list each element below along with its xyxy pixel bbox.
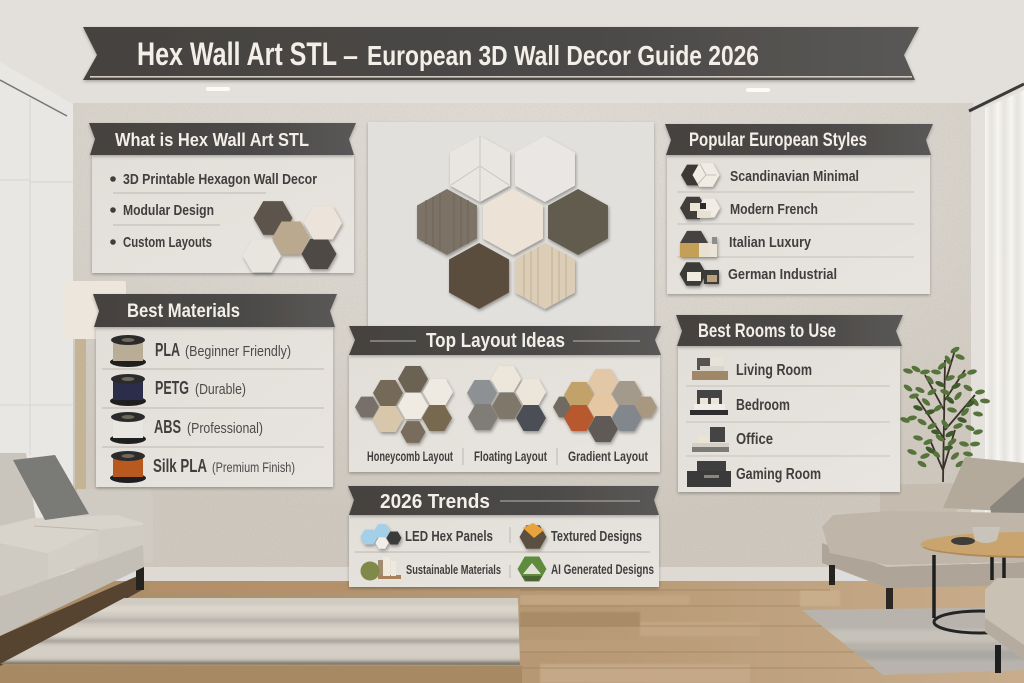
title banner: Hex Wall Art STL xyxy=(137,36,337,72)
bullet list xyxy=(110,171,317,251)
title banner xyxy=(83,27,919,80)
trend: LED hex panels xyxy=(360,524,493,549)
right sofa and coffee table xyxy=(822,457,1024,673)
layout: honeycomb xyxy=(355,366,453,464)
hexagon arrangement xyxy=(417,136,608,309)
layout: gradient xyxy=(553,369,657,464)
row: PETG: (Durable) xyxy=(195,382,246,398)
trend: sustainable materials xyxy=(360,557,501,580)
row: Silk PLA: Silk PLA xyxy=(153,456,207,476)
trend: AI generated designs: AI Generated Designs xyxy=(551,561,654,577)
style: italian luxury: Italian Luxury xyxy=(729,234,812,251)
panel: 2026 trends xyxy=(348,486,659,587)
room: gaming room: Gaming Room xyxy=(736,466,821,483)
heading ribbon xyxy=(93,294,337,327)
row: Silk PLA: (Premium Finish) xyxy=(212,459,295,475)
style: scandinavian minimal xyxy=(681,163,859,187)
heading ribbon: Top Layout Ideas xyxy=(426,330,565,352)
plant xyxy=(899,345,990,482)
layout: floating: Floating Layout xyxy=(474,448,547,464)
room: office xyxy=(692,427,773,452)
row: ABS xyxy=(110,412,263,444)
style: italian luxury xyxy=(680,231,812,257)
style: scandinavian minimal: Scandinavian Minimal xyxy=(730,168,859,185)
trend: LED hex panels: LED Hex Panels xyxy=(405,529,493,545)
layout: gradient: Gradient Layout xyxy=(568,448,648,464)
floor lamp xyxy=(64,281,126,490)
row: PLA: (Beginner Friendly) xyxy=(185,344,291,360)
title banner: European 3D Wall Decor Guide 2026 xyxy=(367,40,759,71)
trend: AI generated designs xyxy=(518,556,654,582)
row: Silk PLA xyxy=(110,451,295,483)
room: living room xyxy=(692,358,812,380)
title banner: – xyxy=(343,40,358,71)
heading ribbon xyxy=(676,315,903,346)
trend: sustainable materials: Sustainable Materials xyxy=(406,562,501,577)
bullet list: Modular Design xyxy=(123,202,214,219)
panel: what is hex wall art stl xyxy=(89,123,356,273)
heading ribbon: What is Hex Wall Art STL xyxy=(115,129,309,150)
bullet list: 3D Printable Hexagon Wall Decor xyxy=(123,171,317,188)
left rug xyxy=(0,598,520,665)
room: living room: Living Room xyxy=(736,362,812,379)
right rug xyxy=(802,608,1024,675)
room: bedroom: Bedroom xyxy=(736,397,790,414)
panel: top layout ideas xyxy=(349,326,661,472)
row: PLA xyxy=(110,335,291,367)
bullet list: Custom Layouts xyxy=(123,234,212,251)
panel: center hexagon wall art xyxy=(368,122,654,328)
heading ribbon xyxy=(349,326,661,355)
row: PETG xyxy=(110,374,246,406)
panel: popular european styles xyxy=(665,124,933,294)
style: modern french: Modern French xyxy=(730,201,818,218)
room: bedroom xyxy=(690,390,790,415)
trend: textured designs xyxy=(520,523,642,549)
heading ribbon xyxy=(89,123,356,155)
layout: honeycomb: Honeycomb Layout xyxy=(367,448,453,464)
trend: textured designs: Textured Designs xyxy=(551,529,642,545)
heading ribbon xyxy=(665,124,933,155)
row: ABS: (Professional) xyxy=(187,421,263,437)
floor shadow under left sofa xyxy=(0,575,142,666)
heading ribbon: Popular European Styles xyxy=(689,130,867,151)
icon: hexagon cluster xyxy=(243,201,342,272)
layout: floating xyxy=(467,366,547,464)
left sofa xyxy=(0,453,153,636)
hexagon surface details xyxy=(426,136,566,305)
heading ribbon: 2026 Trends xyxy=(380,491,490,513)
heading ribbon xyxy=(348,486,659,515)
room: office: Office xyxy=(736,431,773,448)
heading ribbon: Best Materials xyxy=(127,301,240,322)
room: gaming room xyxy=(687,461,821,487)
row: PLA: PLA xyxy=(155,340,180,360)
style: german industrial: German Industrial xyxy=(728,266,837,283)
heading ribbon: Best Rooms to Use xyxy=(698,321,836,342)
style: german industrial xyxy=(680,262,837,286)
row: ABS: ABS xyxy=(154,417,181,437)
panel: best rooms to use xyxy=(676,315,903,492)
row: PETG: PETG xyxy=(155,378,189,398)
style: modern french xyxy=(680,197,818,219)
panel: best materials xyxy=(93,294,337,487)
